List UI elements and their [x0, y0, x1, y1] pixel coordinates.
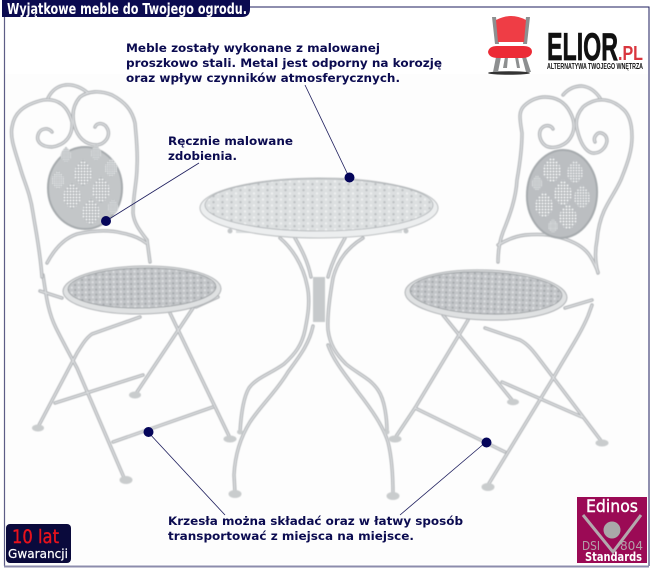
table central bracket	[313, 277, 325, 322]
callout: folding: transportować z miejsca na miejsce.	[168, 529, 414, 543]
photo: right chair	[388, 86, 632, 491]
table top	[200, 178, 438, 238]
callout text: material: Meble zostały wykonane z malowanej	[126, 41, 380, 55]
leader line: right chair	[400, 442, 486, 515]
logo suffix: .PL	[618, 43, 643, 65]
marker: right chair	[482, 438, 492, 448]
left chair seat	[63, 265, 221, 315]
right chair medallion	[524, 148, 600, 240]
right chair feet	[388, 399, 608, 491]
leader line: table	[305, 85, 349, 177]
badge heading: Edinos	[586, 497, 638, 516]
leader line: medallion	[106, 163, 199, 221]
icon: V and circle	[583, 515, 641, 552]
right chair back rails	[498, 86, 632, 273]
photo: table	[200, 178, 438, 500]
badge 804: 804	[620, 538, 643, 553]
table feet	[228, 430, 400, 500]
icon: red chair	[488, 16, 532, 75]
marker: left chair	[144, 427, 154, 437]
badge: 10 year warranty	[6, 524, 71, 563]
title: Wyjątkowe meble do Twojego ogrodu.	[7, 0, 247, 18]
callout: folding	[144, 427, 492, 543]
callout: decoration	[101, 134, 293, 226]
right chair seat	[404, 267, 568, 323]
left chair feet	[32, 392, 236, 484]
badge label: Gwarancji	[8, 546, 68, 561]
right chair legs	[395, 300, 602, 485]
callout: decoration: zdobienia.	[168, 149, 237, 163]
left chair back rails	[11, 85, 150, 277]
callout: material: oraz wpływ czynników atmosferycznych.	[126, 71, 400, 85]
badge number: 10 lat	[12, 526, 59, 548]
title banner	[2, 0, 250, 18]
left chair medallion	[48, 145, 122, 229]
callout text: decoration: Ręcznie malowane	[168, 134, 293, 148]
callout: material	[126, 41, 442, 182]
marker: table	[344, 172, 354, 182]
leader line: left chair	[148, 432, 225, 515]
badge: Edinos standards	[577, 497, 647, 564]
callout: material: proszkowo stali. Metal jest odporny na korozję	[126, 56, 442, 70]
table legs	[234, 238, 393, 495]
logo: Elior	[488, 16, 643, 75]
marker: medallion	[101, 216, 111, 226]
badge DSI: DSI	[582, 538, 600, 553]
left chair legs	[38, 275, 230, 480]
callout text: folding: Krzesła można składać oraz w łatwy sposób	[168, 514, 463, 528]
photo: left chair	[11, 85, 237, 484]
